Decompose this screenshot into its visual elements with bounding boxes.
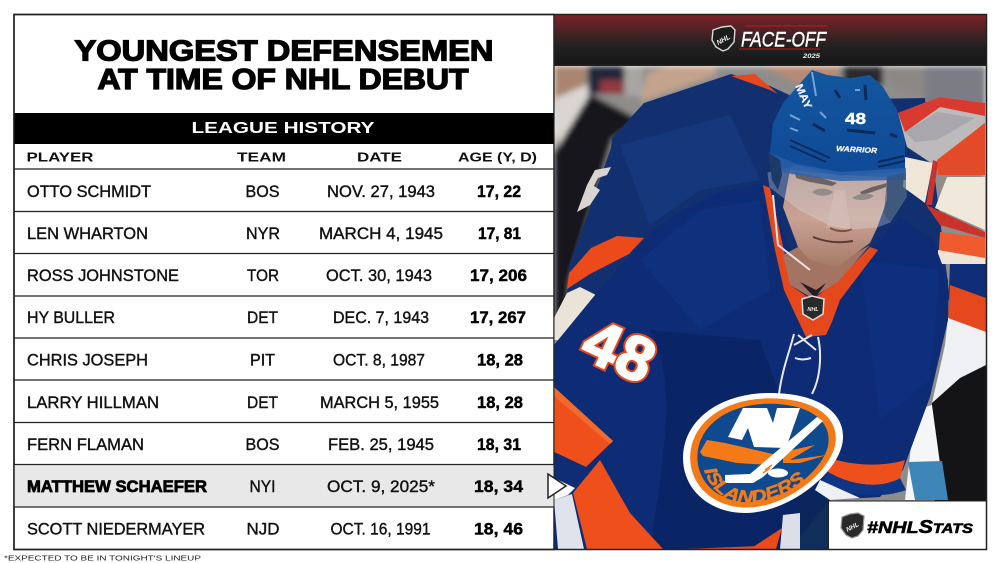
row: Hy Buller: 17, 267: [470, 308, 526, 327]
row: Larry Hillman: LARRY HILLMAN: [27, 393, 159, 412]
row: Larry Hillman: DET: [247, 393, 278, 412]
row: Hy Buller: DET: [247, 308, 278, 327]
goalie glove and pad: [898, 97, 986, 332]
section bar: league history: LEAGUE HISTORY: [192, 120, 375, 137]
row: Fern Flaman: 18, 31: [477, 435, 521, 454]
neck and orange collar: [763, 185, 878, 337]
jersey left sleeve orange stripes: [554, 387, 800, 549]
helmet: [770, 70, 905, 176]
row: Larry Hillman: [27, 393, 523, 412]
photo and stats frame: [554, 66, 986, 550]
icon: NHL shield: NHL: [845, 521, 860, 534]
row: Scott Niedermayer: [27, 520, 523, 538]
column headers: AGE (Y, D): [458, 150, 537, 164]
row: Len Wharton: NYR: [246, 224, 280, 243]
main player jersey: [554, 254, 948, 549]
column headers: [26, 150, 537, 164]
sleeve cuff orange band: [828, 458, 905, 485]
row: Hy Buller: HY BULLER: [27, 308, 115, 327]
wordmark: ISLANDERS: [704, 468, 804, 502]
face: [783, 170, 887, 267]
NY letters: [728, 408, 800, 448]
row: Hy Buller: DEC. 7, 1943: [333, 308, 429, 327]
Face-Off logo: FACE-OFF: [741, 28, 827, 52]
row: Chris Joseph: CHRIS JOSEPH: [27, 350, 148, 370]
hockey stick and puck: [725, 417, 823, 483]
icon: NHL shield: [712, 26, 735, 51]
row: Fern Flaman: [27, 435, 521, 454]
row: Scott Niedermayer: OCT. 16, 1991: [330, 520, 430, 538]
icon: NHL shield: NHL: [716, 34, 732, 47]
panel: Face-Off header: [554, 14, 986, 65]
panel: table: [14, 14, 554, 550]
panel: player photo illustration: [554, 66, 986, 549]
callout: NHLStats badge: #NHL STATS: [867, 516, 974, 537]
visor: [768, 152, 906, 229]
row: Ross Johnstone: ROSS JOHNSTONE: [27, 266, 179, 285]
row highlight: Matthew Schaefer: [14, 465, 554, 507]
row: Otto Schmidt: NOV. 27, 1943: [327, 182, 435, 201]
row: Fern Flaman: BOS: [246, 435, 280, 454]
row: Ross Johnstone: TOR: [247, 266, 279, 285]
section bar: league history: [14, 113, 554, 144]
row: Chris Joseph: 18, 28: [477, 350, 523, 370]
row: Otto Schmidt: 17, 22: [477, 182, 521, 201]
row: Fern Flaman: FEB. 25, 1945: [328, 435, 434, 454]
title: YOUNGEST DEFENSEMEN: [74, 36, 494, 68]
crest: NHL shield on collar: [802, 296, 824, 320]
icon: NHL shield: [841, 513, 864, 538]
jersey laces: [779, 334, 820, 394]
footnote: *EXPECTED TO BE IN TONIGHT'S LINEUP: [4, 554, 201, 562]
row: Len Wharton: 17, 81: [478, 224, 521, 243]
row: Len Wharton: LEN WHARTON: [27, 224, 148, 243]
row: Scott Niedermayer: SCOTT NIEDERMAYER: [27, 520, 205, 538]
chin strap: [773, 195, 810, 270]
column headers: TEAM: [237, 150, 286, 164]
row: Len Wharton: [27, 224, 521, 243]
row: Scott Niedermayer: NJD: [246, 520, 280, 538]
shoulder number 48: 8: [605, 320, 665, 397]
shoulder number 48: 4: [572, 306, 633, 383]
island: [700, 440, 777, 465]
Islanders crest: [683, 393, 843, 513]
row: Matthew Schaefer: OCT. 9, 2025*: [327, 477, 435, 496]
row: Otto Schmidt: BOS: [246, 182, 280, 201]
shoulder number 48: 4: [572, 306, 633, 383]
row: Scott Niedermayer: 18, 46: [474, 520, 523, 538]
row: Fern Flaman: FERN FLAMAN: [27, 435, 144, 454]
row: Ross Johnstone: [27, 266, 527, 285]
row: Ross Johnstone: OCT. 30, 1943: [326, 266, 432, 285]
row: Larry Hillman: 18, 28: [477, 393, 523, 412]
row: Matthew Schaefer: 18, 34: [474, 477, 524, 496]
right side background: ice, black pad, blue: [790, 318, 986, 549]
crest: NHL shield on collar: NHL: [807, 307, 819, 313]
row: Matthew Schaefer: [27, 477, 524, 496]
title: [74, 36, 494, 96]
Face-Off logo: [739, 26, 827, 60]
arrow: highlights Schaefer row: [548, 474, 566, 498]
column headers: DATE: [357, 150, 402, 164]
row: Matthew Schaefer: NYI: [250, 477, 276, 496]
title: AT TIME OF NHL DEBUT: [98, 64, 469, 96]
helmet: 48: [845, 111, 866, 128]
row: Len Wharton: MARCH 4, 1945: [319, 224, 443, 243]
callout: NHLStats badge: [828, 501, 986, 550]
row: Hy Buller: [27, 308, 526, 327]
row: Chris Joseph: PIT: [250, 350, 275, 370]
shoulder number 48: 8: [605, 320, 665, 397]
row: Chris Joseph: [27, 350, 523, 370]
column headers: PLAYER: [26, 150, 94, 164]
row: Otto Schmidt: OTTO SCHMIDT: [27, 182, 151, 201]
row: Chris Joseph: OCT. 8, 1987: [333, 350, 425, 370]
helmet: WARRIOR: [836, 144, 878, 155]
helmet: MAY: [792, 82, 814, 112]
back player jersey: [554, 74, 950, 340]
photo background: blurred arena and crowd: [554, 66, 986, 500]
row: Matthew Schaefer: MATTHEW SCHAEFER: [27, 477, 207, 496]
row: Larry Hillman: MARCH 5, 1955: [320, 393, 439, 412]
row: Ross Johnstone: 17, 206: [470, 266, 527, 285]
row: Otto Schmidt: [27, 182, 521, 201]
Face-Off logo: 2025: [802, 53, 820, 60]
glove cuff: [554, 287, 596, 340]
shoulder number 48: [578, 322, 658, 383]
